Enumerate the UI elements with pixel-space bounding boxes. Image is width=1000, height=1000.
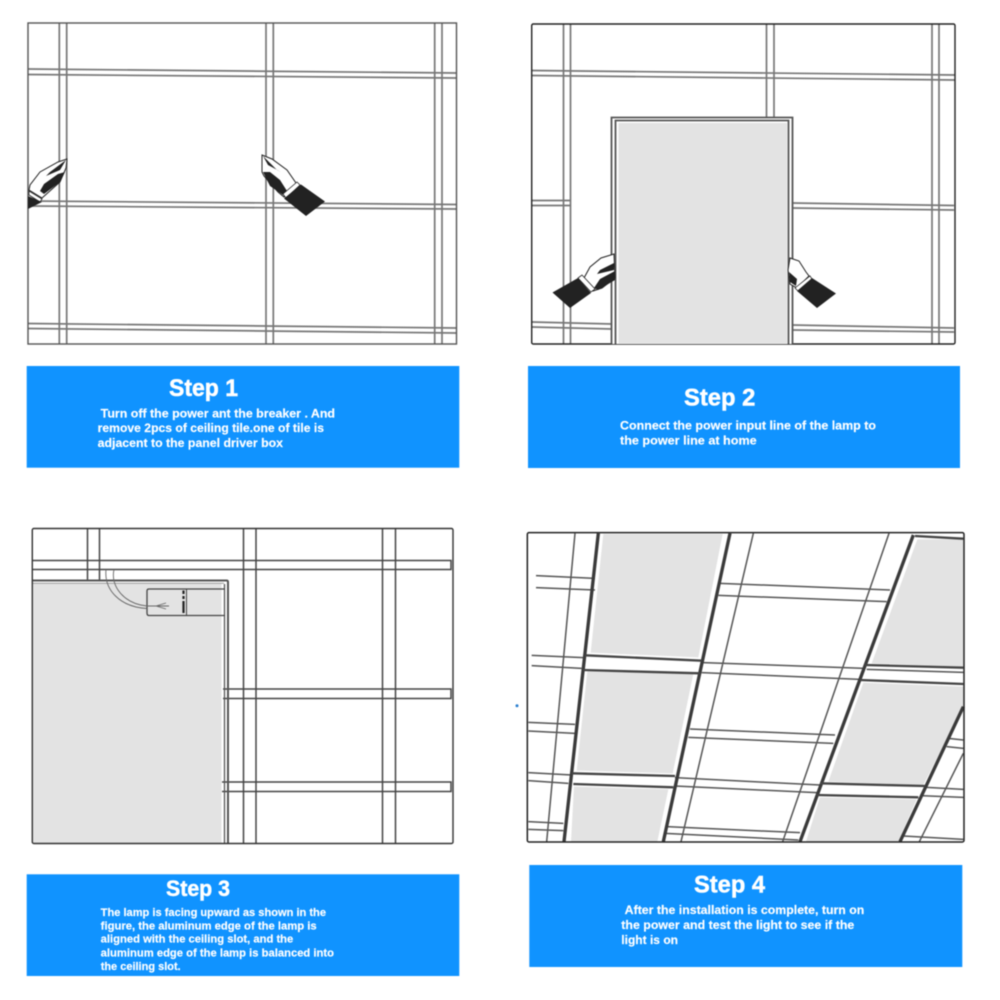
panel: step 2 caption — [528, 366, 960, 468]
blue dot artifact — [516, 704, 518, 707]
thick lamp frames — [564, 533, 963, 842]
panel: step 2 lifting lamp illustration — [532, 24, 955, 344]
text: step 2 instructions: Connect the power input line of the lamp to — [620, 418, 876, 432]
panel: step 3 lamp in ceiling slot illustration — [32, 528, 453, 844]
panel: step 1 caption — [27, 366, 459, 468]
text: step 1 instructions — [98, 406, 335, 450]
lamp panel with frame — [33, 580, 228, 843]
text: step 2 instructions — [620, 418, 876, 447]
text: step 1 instructions: Turn off the power ant the breaker . And — [101, 406, 335, 420]
icon: right hand with dark sleeve — [262, 155, 325, 216]
text: step 3 instructions: The lamp is facing upward as shown in the — [101, 907, 326, 919]
text: step 1 instructions: remove 2pcs of ceiling tile.one of tile is — [98, 421, 324, 435]
text: step 2 instructions: the power line at home — [620, 433, 757, 447]
text: step 1 instructions: adjacent to the panel driver box — [98, 436, 283, 450]
heading: step 1: Step 1 — [169, 375, 238, 402]
driver box with wire — [106, 570, 225, 616]
text: step 4 instructions: the power and test the light to see if the — [621, 918, 855, 932]
text: step 3 instructions: figure, the aluminum edge of the lamp is — [101, 920, 317, 932]
text: step 3 instructions: aluminum edge of the lamp is balanced into — [101, 947, 334, 959]
heading: step 3: Step 3 — [166, 876, 230, 901]
text: step 4 instructions: After the installation is complete, turn on — [625, 903, 864, 917]
panel: step 3 caption — [27, 874, 459, 976]
heading: step 4: Step 4 — [694, 872, 766, 899]
text: step 4 instructions — [621, 903, 864, 947]
text: step 3 instructions — [101, 907, 334, 973]
panel: step 4 caption — [529, 865, 962, 967]
panel: step 1 ceiling grid illustration — [28, 23, 456, 344]
icon: left hand holding lamp — [552, 254, 615, 308]
icon: left hand reaching to ceiling tile — [28, 159, 67, 209]
text: step 4 instructions: light is on — [621, 933, 678, 947]
lamp panel — [612, 118, 792, 344]
text: step 3 instructions: the ceiling slot. — [101, 961, 181, 973]
icon: right hand holding lamp — [788, 258, 836, 308]
text: step 3 instructions: aligned with the ceiling slot, and the — [101, 934, 293, 946]
panel: step 4 installed ceiling illustration — [527, 533, 964, 842]
heading: step 2: Step 2 — [684, 385, 755, 412]
lit lamp panels — [571, 534, 963, 842]
thin ceiling rails — [528, 533, 963, 842]
